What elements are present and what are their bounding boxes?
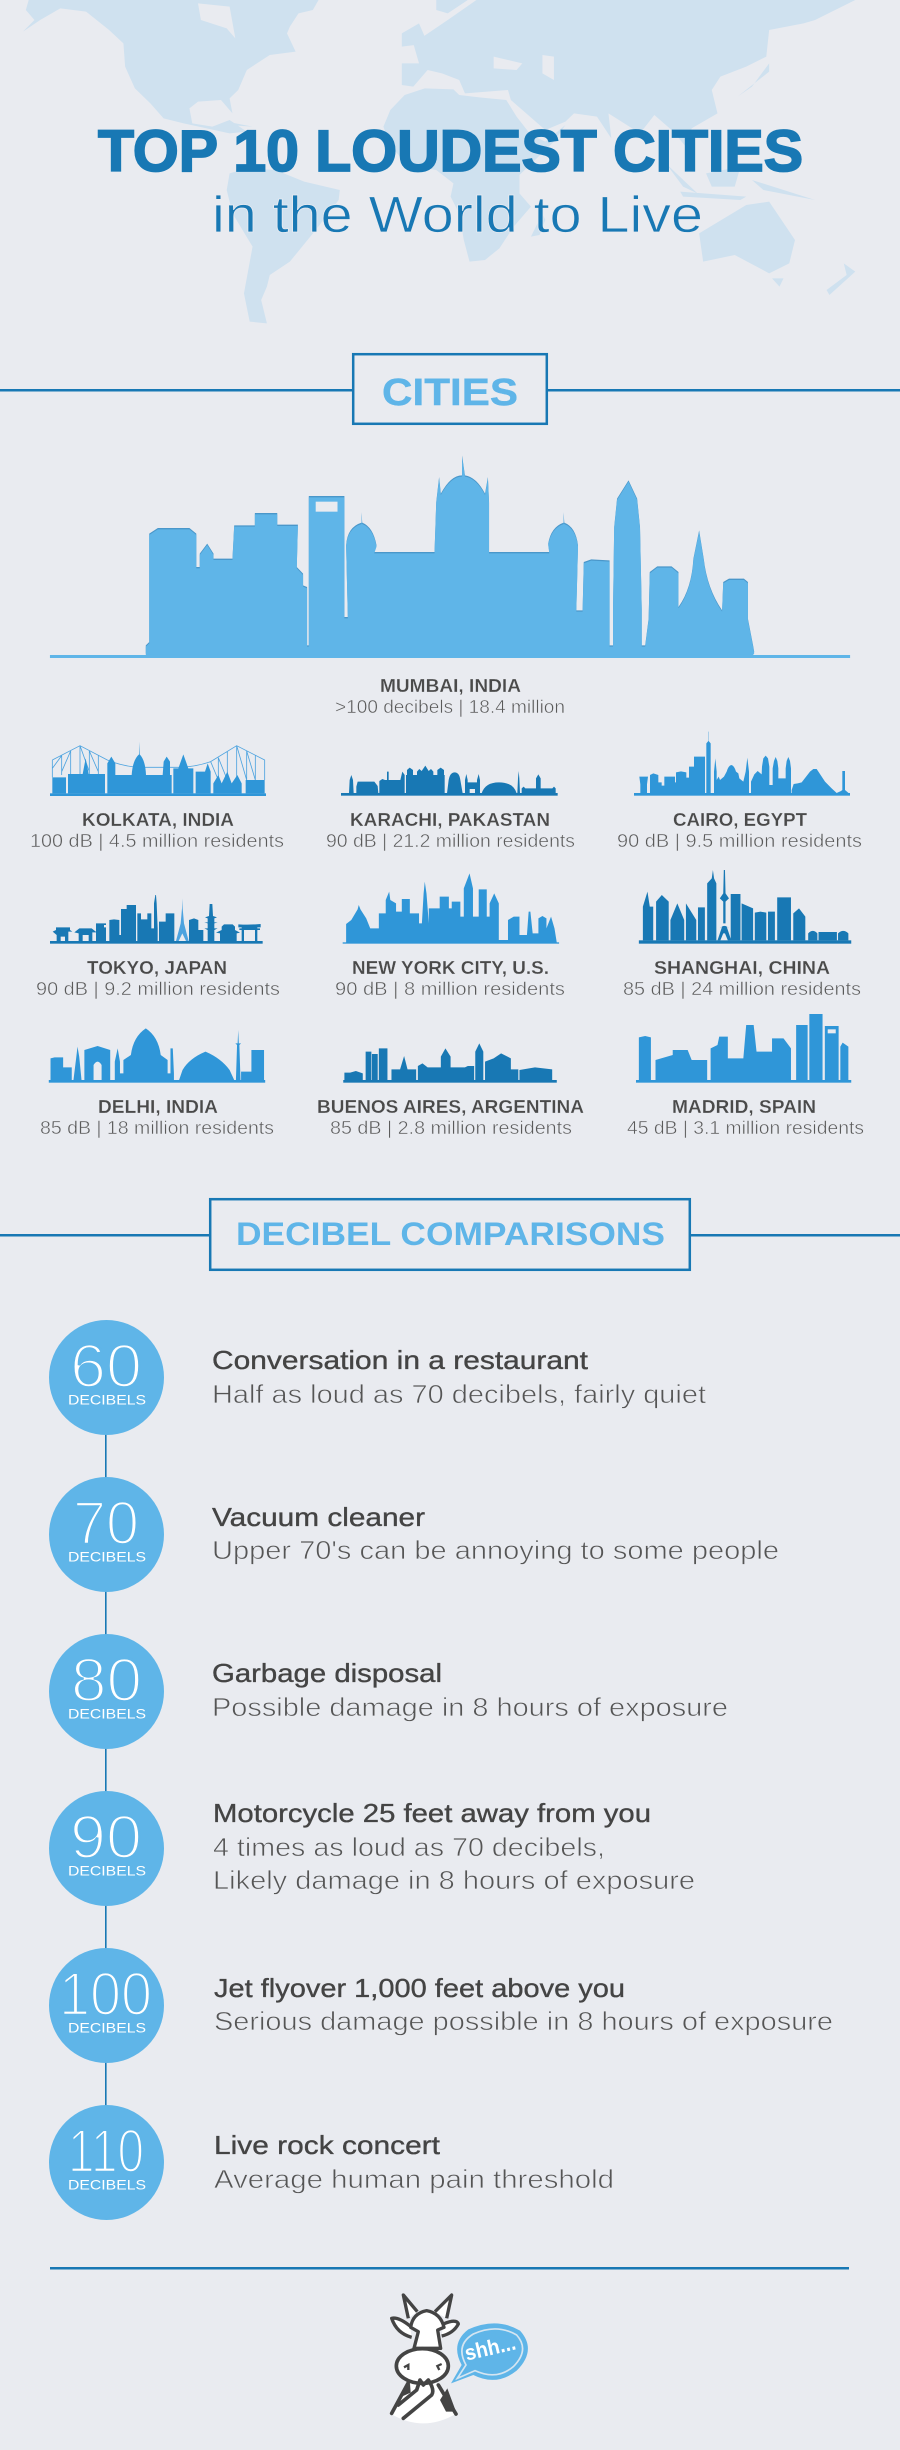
skyline: Tokyo xyxy=(50,895,263,944)
decibel row: 100: Jet flyover 1,000 feet above you xyxy=(214,1973,625,2003)
city label: Tokyo: 90 dB | 9.2 million residents xyxy=(36,979,280,999)
decibel row: 90: 4 times as loud as 70 decibels, xyxy=(213,1832,605,1862)
decibel row: 90 xyxy=(49,1791,695,1906)
city label: Cairo: 90 dB | 9.5 million residents xyxy=(617,831,862,851)
city label: Cairo: CAIRO, EGYPT xyxy=(673,810,807,830)
city label: Buenos Aires: 85 dB | 2.8 million residents xyxy=(330,1118,572,1138)
decibel row: 110: Live rock concert xyxy=(214,2130,441,2160)
decibel row: 110 xyxy=(49,2105,614,2220)
decibel row: 80: Possible damage in 8 hours of exposure xyxy=(212,1692,728,1722)
decibel row: 70: 70 xyxy=(73,1489,139,1557)
city label: Shanghai: 85 dB | 24 million residents xyxy=(623,979,861,999)
cow nostrils xyxy=(404,2364,442,2370)
city label: Tokyo xyxy=(36,958,280,999)
section heading: decibel comparisons xyxy=(0,1199,900,1270)
speech bubble inner outline xyxy=(457,2329,523,2378)
cow outline and hoof xyxy=(392,2380,456,2418)
connector lines between decibel circles xyxy=(105,1430,107,2110)
city label: Mumbai: >100 decibels | 18.4 million xyxy=(335,697,565,717)
cow body xyxy=(390,2378,457,2423)
city label: New York City: NEW YORK CITY, U.S. xyxy=(352,958,549,978)
decibel row: 80: Garbage disposal xyxy=(212,1658,442,1688)
city label: Delhi: 85 dB | 18 million residents xyxy=(40,1118,274,1138)
decibel row: 100: Serious damage possible in 8 hours of exposure xyxy=(214,2006,833,2036)
city label: Delhi xyxy=(40,1097,274,1138)
decibel row: 70 xyxy=(49,1477,779,1592)
city label: Karachi: KARACHI, PAKASTAN xyxy=(350,810,550,830)
cow spots xyxy=(402,2383,456,2412)
decibel row: 70: Upper 70's can be annoying to some people xyxy=(212,1535,779,1565)
decibel row: 80: DECIBELS xyxy=(68,1706,146,1722)
decibel row: 60: Half as loud as 70 decibels, fairly quiet xyxy=(212,1379,707,1409)
decibel row: 110: DECIBELS xyxy=(68,2176,146,2192)
city label: Kolkata: 100 dB | 4.5 million residents xyxy=(30,831,284,851)
decibel row: 90: 90 xyxy=(70,1803,142,1871)
city label: Kolkata: KOLKATA, INDIA xyxy=(82,810,234,830)
decibel row: 80 xyxy=(49,1634,728,1749)
skyline: Mumbai xyxy=(50,455,850,658)
decibel row: 60: DECIBELS xyxy=(68,1392,146,1408)
decibel row: 110: Average human pain threshold xyxy=(214,2164,614,2194)
cow horns and ears xyxy=(392,2295,458,2337)
title: TOP 10 LOUDEST CITIES xyxy=(98,119,803,184)
decibel row: 110: 110 xyxy=(68,2117,144,2185)
city label: Cairo xyxy=(617,810,862,851)
city label: Tokyo: TOKYO, JAPAN xyxy=(87,958,227,978)
skyline: Karachi xyxy=(341,766,558,796)
decibel row: 90: Motorcycle 25 feet away from you xyxy=(213,1798,651,1828)
city label: Madrid xyxy=(627,1097,864,1138)
city label: Kolkata xyxy=(30,810,284,851)
city label: Mumbai: MUMBAI, INDIA xyxy=(380,676,521,696)
city label: New York City: 90 dB | 8 million residents xyxy=(335,979,565,999)
city label: Madrid: 45 dB | 3.1 million residents xyxy=(627,1118,864,1138)
section heading: decibel comparisons: DECIBEL COMPARISONS xyxy=(236,1216,665,1252)
decibel row: 60: 60 xyxy=(70,1332,142,1400)
section heading: cities: CITIES xyxy=(382,372,518,414)
city label: Karachi xyxy=(326,810,575,851)
footer rule xyxy=(50,2267,849,2270)
city label: New York City xyxy=(335,958,565,999)
city label: Shanghai xyxy=(623,958,861,999)
skyline: New York City xyxy=(343,873,559,944)
skyline: Cairo xyxy=(634,732,850,796)
city label: Karachi: 90 dB | 21.2 million residents xyxy=(326,831,575,851)
skyline: Buenos Aires xyxy=(343,1043,557,1083)
city label: Delhi: DELHI, INDIA xyxy=(98,1097,218,1117)
decibel row: 90: DECIBELS xyxy=(68,1862,146,1878)
city label: Madrid: MADRID, SPAIN xyxy=(672,1097,816,1117)
cow muzzle xyxy=(396,2349,448,2383)
decibel row: 70: DECIBELS xyxy=(68,1548,146,1564)
world map background xyxy=(23,0,855,323)
decibel row: 60 xyxy=(49,1320,707,1435)
subtitle: in the World to Live xyxy=(212,186,703,243)
city label: Buenos Aires xyxy=(317,1097,584,1138)
skyline: Madrid xyxy=(636,1014,851,1083)
city label: Mumbai xyxy=(335,676,565,717)
section heading: cities xyxy=(0,354,900,424)
speech bubble text: shh... xyxy=(462,2331,518,2366)
city label: Shanghai: SHANGHAI, CHINA xyxy=(654,958,830,978)
skyline: Delhi xyxy=(49,1028,265,1083)
cow head xyxy=(411,2311,444,2348)
decibel row: 70: Vacuum cleaner xyxy=(212,1502,425,1532)
speech bubble xyxy=(451,2323,528,2383)
skyline: Kolkata xyxy=(50,742,266,796)
decibel row: 100 xyxy=(49,1948,833,2063)
city label: Buenos Aires: BUENOS AIRES, ARGENTINA xyxy=(317,1097,584,1117)
decibel row: 80: 80 xyxy=(71,1646,142,1714)
icon: cow mascot with speech bubble xyxy=(390,2295,528,2423)
decibel row: 60: Conversation in a restaurant xyxy=(212,1345,589,1375)
skyline: Shanghai xyxy=(639,870,851,944)
decibel row: 100: 100 xyxy=(59,1960,152,2028)
decibel row: 90: Likely damage in 8 hours of exposure xyxy=(213,1865,695,1895)
decibel row: 100: DECIBELS xyxy=(68,2020,146,2036)
